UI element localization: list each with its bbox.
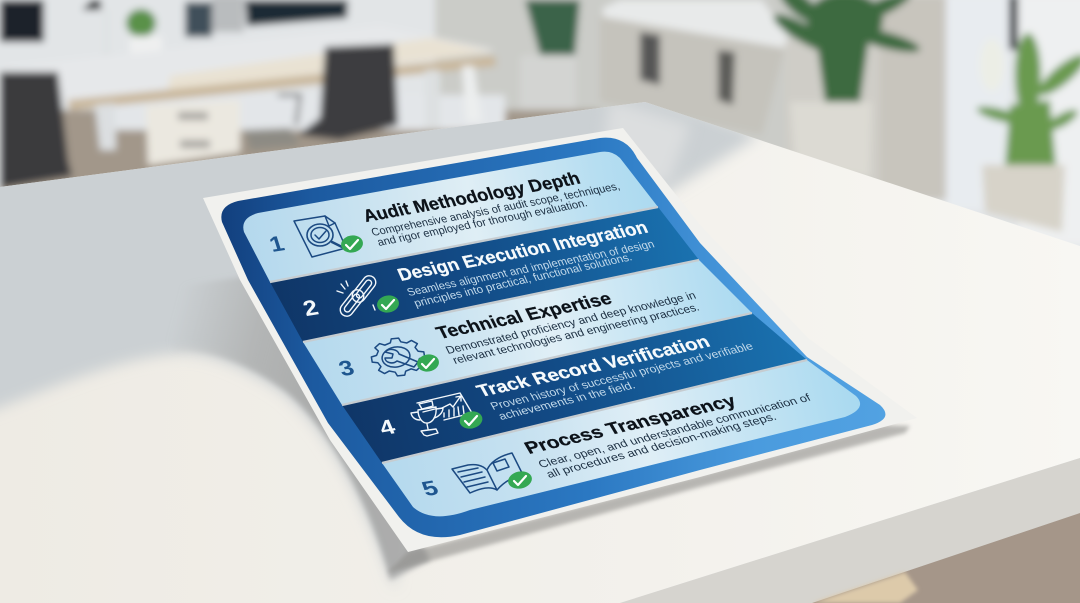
row 1 description: and rigor employed for thorough evaluation.: [376, 198, 589, 249]
row 4 description: achievements in the field.: [497, 380, 638, 423]
row 2 title: Design Execution Integration: [394, 217, 651, 285]
row 1: audit methodology depth: [243, 152, 658, 282]
row 5 title: Process Transparency: [520, 390, 740, 457]
paper: [203, 128, 917, 552]
row 2 description: Seamless alignment and implementation of design: [405, 239, 656, 299]
row 3: technical expertise: [303, 260, 752, 405]
row 4: track record verification: [342, 313, 807, 463]
icon: chain link: [337, 273, 378, 319]
icon: audit document with magnifier: [294, 216, 346, 257]
row 1 title: Audit Methodology Depth: [360, 168, 583, 226]
row 2: design execution integration: [270, 207, 699, 342]
row 3 description: Demonstrated proficiency and deep knowledge in: [444, 290, 698, 357]
row 5 band: [382, 360, 860, 516]
row 4 title: Track Record Verification: [473, 331, 713, 400]
badge: check 1: [340, 234, 364, 254]
row 5 description: Clear, open, and understandable communication of: [536, 392, 814, 471]
row 3 number: 3: [335, 355, 357, 381]
row 4 description: Proven history of successful projects and verifiable: [489, 341, 755, 413]
badge: check 3: [416, 353, 440, 373]
badge: check 2: [376, 294, 400, 314]
wooden floor: [812, 513, 1080, 603]
row 1 description: Comprehensive analysis of audit scope, techniques,: [370, 181, 622, 239]
icon: trophy and growth chart: [411, 393, 472, 436]
row 2 number: 2: [300, 295, 321, 321]
row 3 description: relevant technologies and engineering practices.: [451, 302, 702, 367]
paper shadow: [387, 425, 910, 573]
table shadow: [0, 90, 760, 590]
table front edge: [620, 458, 1080, 603]
row 3 band: [303, 260, 752, 405]
row 1 number: 1: [266, 231, 287, 257]
row 4 number: 4: [376, 415, 399, 439]
blurred office background: [0, 0, 1080, 260]
row separators: [270, 207, 807, 463]
row 1 band: [243, 152, 658, 282]
badge: check 4: [458, 409, 484, 431]
row 2 description: principles into practical, functional solutions.: [412, 252, 634, 310]
icon: gear with wrench: [369, 336, 427, 378]
row 4 band: [342, 313, 807, 463]
row 5 number: 5: [418, 476, 442, 501]
blue panel: [221, 138, 885, 537]
document sheet: [203, 128, 917, 552]
row 5: process transparency: [382, 360, 860, 516]
icon: open book: [452, 453, 523, 493]
row 2 band: [270, 207, 699, 342]
badge: check 5: [506, 469, 534, 491]
row 5 description: all procedures and decision-making steps.: [544, 412, 779, 481]
row 3 title: Technical Expertise: [432, 288, 615, 343]
